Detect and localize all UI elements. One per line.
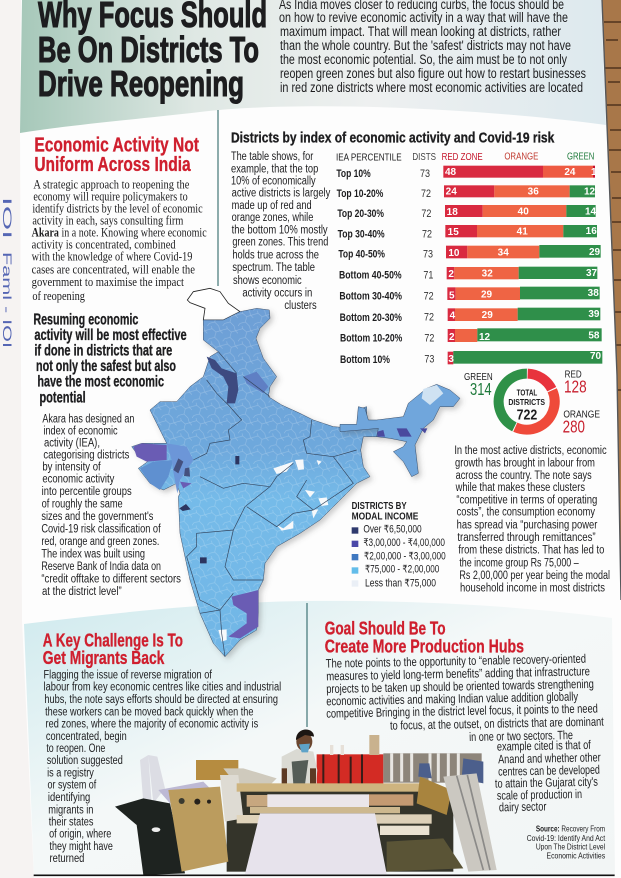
handwritten margin note <box>0 197 14 348</box>
body text: economy will require policymakers to <box>33 189 188 203</box>
text: Akara index: at the district level” <box>42 584 122 598</box>
explanatory text: spectrum. The table <box>232 260 315 274</box>
handwritten margin note: Faml - IOI <box>0 252 14 348</box>
bar values: 12 <box>479 332 491 343</box>
orange count: 280 <box>563 417 585 437</box>
panel: economic activity <box>32 134 207 406</box>
district counts: 73 <box>420 168 430 180</box>
district counts: 71 <box>423 270 433 282</box>
text: migrants: they might have <box>50 839 113 853</box>
pull quote: have the most economic <box>37 374 164 391</box>
intro text: maximum impact. That will mean looking at districts, rather <box>280 24 561 39</box>
text: labour growth: the income group Rs 75,000 – <box>459 555 579 569</box>
explanatory text: active districts is largely <box>232 186 330 200</box>
panel: donut and right text <box>352 364 610 595</box>
text: migrants: red zones, where the majority of economic activity is <box>46 717 258 730</box>
handwritten margin note: IOI <box>0 197 14 239</box>
body text: identify districts by the level of economic <box>32 201 203 215</box>
text: production hubs <box>326 652 604 814</box>
text: production hubs: dairy sector <box>499 799 547 814</box>
bar values: 5 <box>449 290 455 301</box>
bar values: 10 <box>448 248 460 259</box>
text: migrants: migrants in <box>48 802 93 816</box>
bar values: 39 <box>588 309 600 320</box>
explanatory text <box>231 149 330 312</box>
bar values: 2 <box>449 332 455 343</box>
legend <box>352 501 446 589</box>
text: Akara index: Akara has designed an <box>42 412 134 426</box>
panel: districts table <box>231 130 602 366</box>
text: Akara index: by intensity of <box>42 460 101 474</box>
heading: migrants <box>43 630 183 669</box>
coloured rolls behind the machine <box>317 735 483 784</box>
bar values: 24 <box>446 187 457 198</box>
pull quote: Resuming economic <box>33 311 139 328</box>
body text: of reopening <box>32 289 86 303</box>
bar values: 18 <box>447 207 458 218</box>
bar values: 48 <box>445 167 457 178</box>
explanatory text: 10% of economically <box>231 173 316 187</box>
district counts: 72 <box>421 188 431 200</box>
table headers: ORANGE <box>504 151 539 162</box>
bar values: 4 <box>450 311 456 322</box>
heading: production hubs: Goal Should Be To <box>325 618 446 639</box>
heading: Uniform Across India <box>34 153 191 176</box>
explanatory text: orange zones, while <box>232 210 314 224</box>
bar values: 40 <box>518 206 529 217</box>
table headers: RED ZONE <box>442 152 483 163</box>
bar values: 16 <box>586 226 597 237</box>
body text: cases are concentrated, will enable the <box>32 262 195 276</box>
worker <box>282 730 317 784</box>
explanatory text: The table shows, for <box>231 149 313 163</box>
low-income districts <box>218 459 328 642</box>
pull quote: not only the safest but also <box>36 358 176 375</box>
high-income districts <box>133 357 268 638</box>
header band <box>20 0 606 133</box>
bar values: 37 <box>586 268 598 279</box>
bar values: 38 <box>588 288 599 299</box>
explanatory text: example, that the top <box>231 161 319 175</box>
photo: worker at textile machine <box>115 730 497 875</box>
title: Drive Reopening <box>38 63 244 104</box>
table headers: IEA PERCENTILE <box>336 153 402 164</box>
text: migrants: these workers can be moved back quickly when the <box>45 704 253 718</box>
district counts: 72 <box>422 229 432 241</box>
map of India <box>132 288 378 657</box>
green count: GREEN <box>464 372 493 383</box>
explanatory text: made up of red and <box>232 198 312 212</box>
heading: migrants: Get Migrants Back <box>43 648 165 669</box>
legend: ₹3,00,000 - ₹4,00,000 <box>363 537 445 549</box>
text: Akara index: into percentile groups <box>42 484 132 498</box>
bar values: 34 <box>498 248 509 259</box>
explanatory text: activity occurs in <box>242 286 312 300</box>
text: Akara index: sizes and the government's <box>41 509 153 523</box>
district counts: 73 <box>424 354 434 366</box>
text: migrants: solution suggested <box>47 753 123 767</box>
green count: 314 <box>470 379 492 399</box>
body text: with the knowledge of where Covid-19 <box>32 250 192 264</box>
title: Be On Districts To <box>38 29 259 70</box>
row labels: Top 20-30% <box>337 208 384 220</box>
district counts: 72 <box>424 291 434 303</box>
source note <box>527 824 606 860</box>
district counts: 72 <box>424 312 434 324</box>
column dividers <box>218 110 307 727</box>
bottom band <box>24 601 615 875</box>
text: Akara index: economic activity <box>42 472 115 486</box>
district counts: 72 <box>424 332 434 344</box>
text: migrants: to reopen. One <box>46 741 105 755</box>
wooden table edge <box>602 0 621 600</box>
row labels: Top 10-20% <box>337 188 383 200</box>
pull quote: activity will be most effective <box>34 327 187 344</box>
text: labour growth <box>454 443 610 595</box>
explanatory text: shows economic <box>233 273 302 287</box>
stacked bars <box>443 166 602 364</box>
row labels: Bottom 40-50% <box>339 270 402 282</box>
text: migrants: Flagging the issue of reverse migration of <box>44 667 212 681</box>
text: migrants: of origin, where <box>49 827 111 840</box>
text: Akara index: The index was built using <box>41 546 145 560</box>
bottom section <box>34 618 615 875</box>
bar values: 70 <box>590 351 602 362</box>
text: Akara index: index of economic <box>43 424 118 438</box>
red count: 128 <box>564 377 587 397</box>
map: north-east India <box>340 384 460 477</box>
pull quote: if done in districts that are <box>34 343 172 360</box>
bar values: 29 <box>482 310 493 321</box>
mainland <box>132 308 378 657</box>
red count: RED <box>565 370 582 381</box>
district counts: 73 <box>423 249 433 261</box>
legend: ₹2,00,000 - ₹3,00,000 <box>364 551 446 563</box>
legend: Over ₹6,50,000 <box>363 524 422 536</box>
intro text <box>279 0 586 95</box>
legend: MODAL INCOME <box>352 511 419 522</box>
bar values: 29 <box>589 247 601 258</box>
body text: activity is concentrated, combined <box>32 238 176 252</box>
donut centre label <box>508 388 545 423</box>
machine rollers and fabric <box>237 773 497 874</box>
legend: ₹75,000 - ₹2,00,000 <box>365 563 439 575</box>
bar values: 2 <box>448 269 454 280</box>
chart heading: Districts by index of economic activity and Covid-19 risk <box>231 130 554 146</box>
pull quote: potential <box>39 389 86 406</box>
bar values: 14 <box>585 206 597 217</box>
text: migrants: identifying <box>48 790 90 804</box>
text: Akara index: “credit offtake to different sectors <box>41 571 181 585</box>
text: Akara index: Reserve Bank of India data on <box>41 559 161 573</box>
text: migrants <box>44 667 281 865</box>
bar values <box>445 167 602 365</box>
body text: government to maximise the impact <box>32 275 184 289</box>
orange count <box>563 409 600 437</box>
explanatory text: the bottom 10% mostly <box>232 222 328 236</box>
bar values: 24 <box>564 167 576 178</box>
row labels: Bottom 10-20% <box>340 333 402 345</box>
row labels: Top 40-50% <box>338 249 385 261</box>
heading: migrants: A Key Challenge Is To <box>43 630 183 651</box>
heading <box>34 134 199 176</box>
table headers <box>336 151 594 164</box>
explanatory text: green zones. This trend <box>232 235 328 249</box>
donut centre label: 722 <box>517 407 537 423</box>
bar values: 29 <box>481 290 493 301</box>
red count <box>564 370 587 397</box>
table headers: DISTS <box>412 152 436 163</box>
text: Akara index: Covid-19 risk classification of <box>41 521 161 535</box>
row labels: Top 10% <box>336 168 371 180</box>
text: Akara index: activity (IEA), <box>44 436 100 450</box>
heading: Economic Activity Not <box>34 134 199 157</box>
bar values: 12 <box>584 186 596 197</box>
donut chart <box>489 364 564 439</box>
text: migrants: concentrated, begin <box>46 729 127 743</box>
text: migrants: returned <box>50 851 84 865</box>
green count <box>464 372 493 399</box>
bar values: 1 <box>591 167 597 178</box>
bottom rule <box>34 873 615 878</box>
district counts <box>420 168 434 366</box>
donut centre label: TOTAL <box>517 388 538 398</box>
title <box>38 0 267 104</box>
bar values: 41 <box>517 226 528 237</box>
row labels <box>336 168 402 366</box>
body text: A strategic approach to reopening the <box>33 177 190 191</box>
heading: production hubs <box>325 618 524 657</box>
body text: activity in each, says consulting firm <box>32 213 183 227</box>
text: migrants: hubs, the note says efforts should be directed at ensuring <box>44 692 278 706</box>
text: Akara index <box>41 412 181 598</box>
row labels: Top 30-40% <box>338 229 385 241</box>
body text <box>32 177 207 303</box>
row labels: Bottom 30-40% <box>339 291 402 303</box>
text: Akara index: red, orange and green zones. <box>41 534 159 548</box>
bar values: 3 <box>448 354 454 365</box>
text: migrants: their states <box>49 814 94 828</box>
row labels: Bottom 20-30% <box>340 312 402 324</box>
donut centre label: DISTRICTS <box>508 397 545 407</box>
text: migrants: is a registry <box>47 766 94 779</box>
explanatory text: clusters <box>284 298 317 312</box>
row labels: Bottom 10% <box>340 354 390 366</box>
state borders <box>187 352 357 657</box>
district counts: 72 <box>421 208 431 220</box>
bar values: 36 <box>528 186 539 197</box>
pull quote <box>33 311 187 406</box>
legend: DISTRICTS BY <box>352 501 407 512</box>
bar values: 58 <box>588 330 600 341</box>
text: Akara index: of roughly the same <box>42 496 123 510</box>
orange count: ORANGE <box>563 409 600 420</box>
table headers: GREEN <box>567 152 594 163</box>
bar values: 32 <box>482 269 493 280</box>
Kashmir outline <box>187 288 240 320</box>
text: migrants: labour from key economic centres like cities and industrial <box>44 680 281 693</box>
explanatory text: holds true across the <box>232 247 319 261</box>
bar values: 15 <box>448 227 459 238</box>
legend: Less than ₹75,000 <box>365 577 436 589</box>
text: Akara index: categorising districts <box>43 447 129 461</box>
text: migrants: or system of <box>48 778 96 791</box>
body text: Akara in a note. Knowing where economic <box>32 226 207 240</box>
